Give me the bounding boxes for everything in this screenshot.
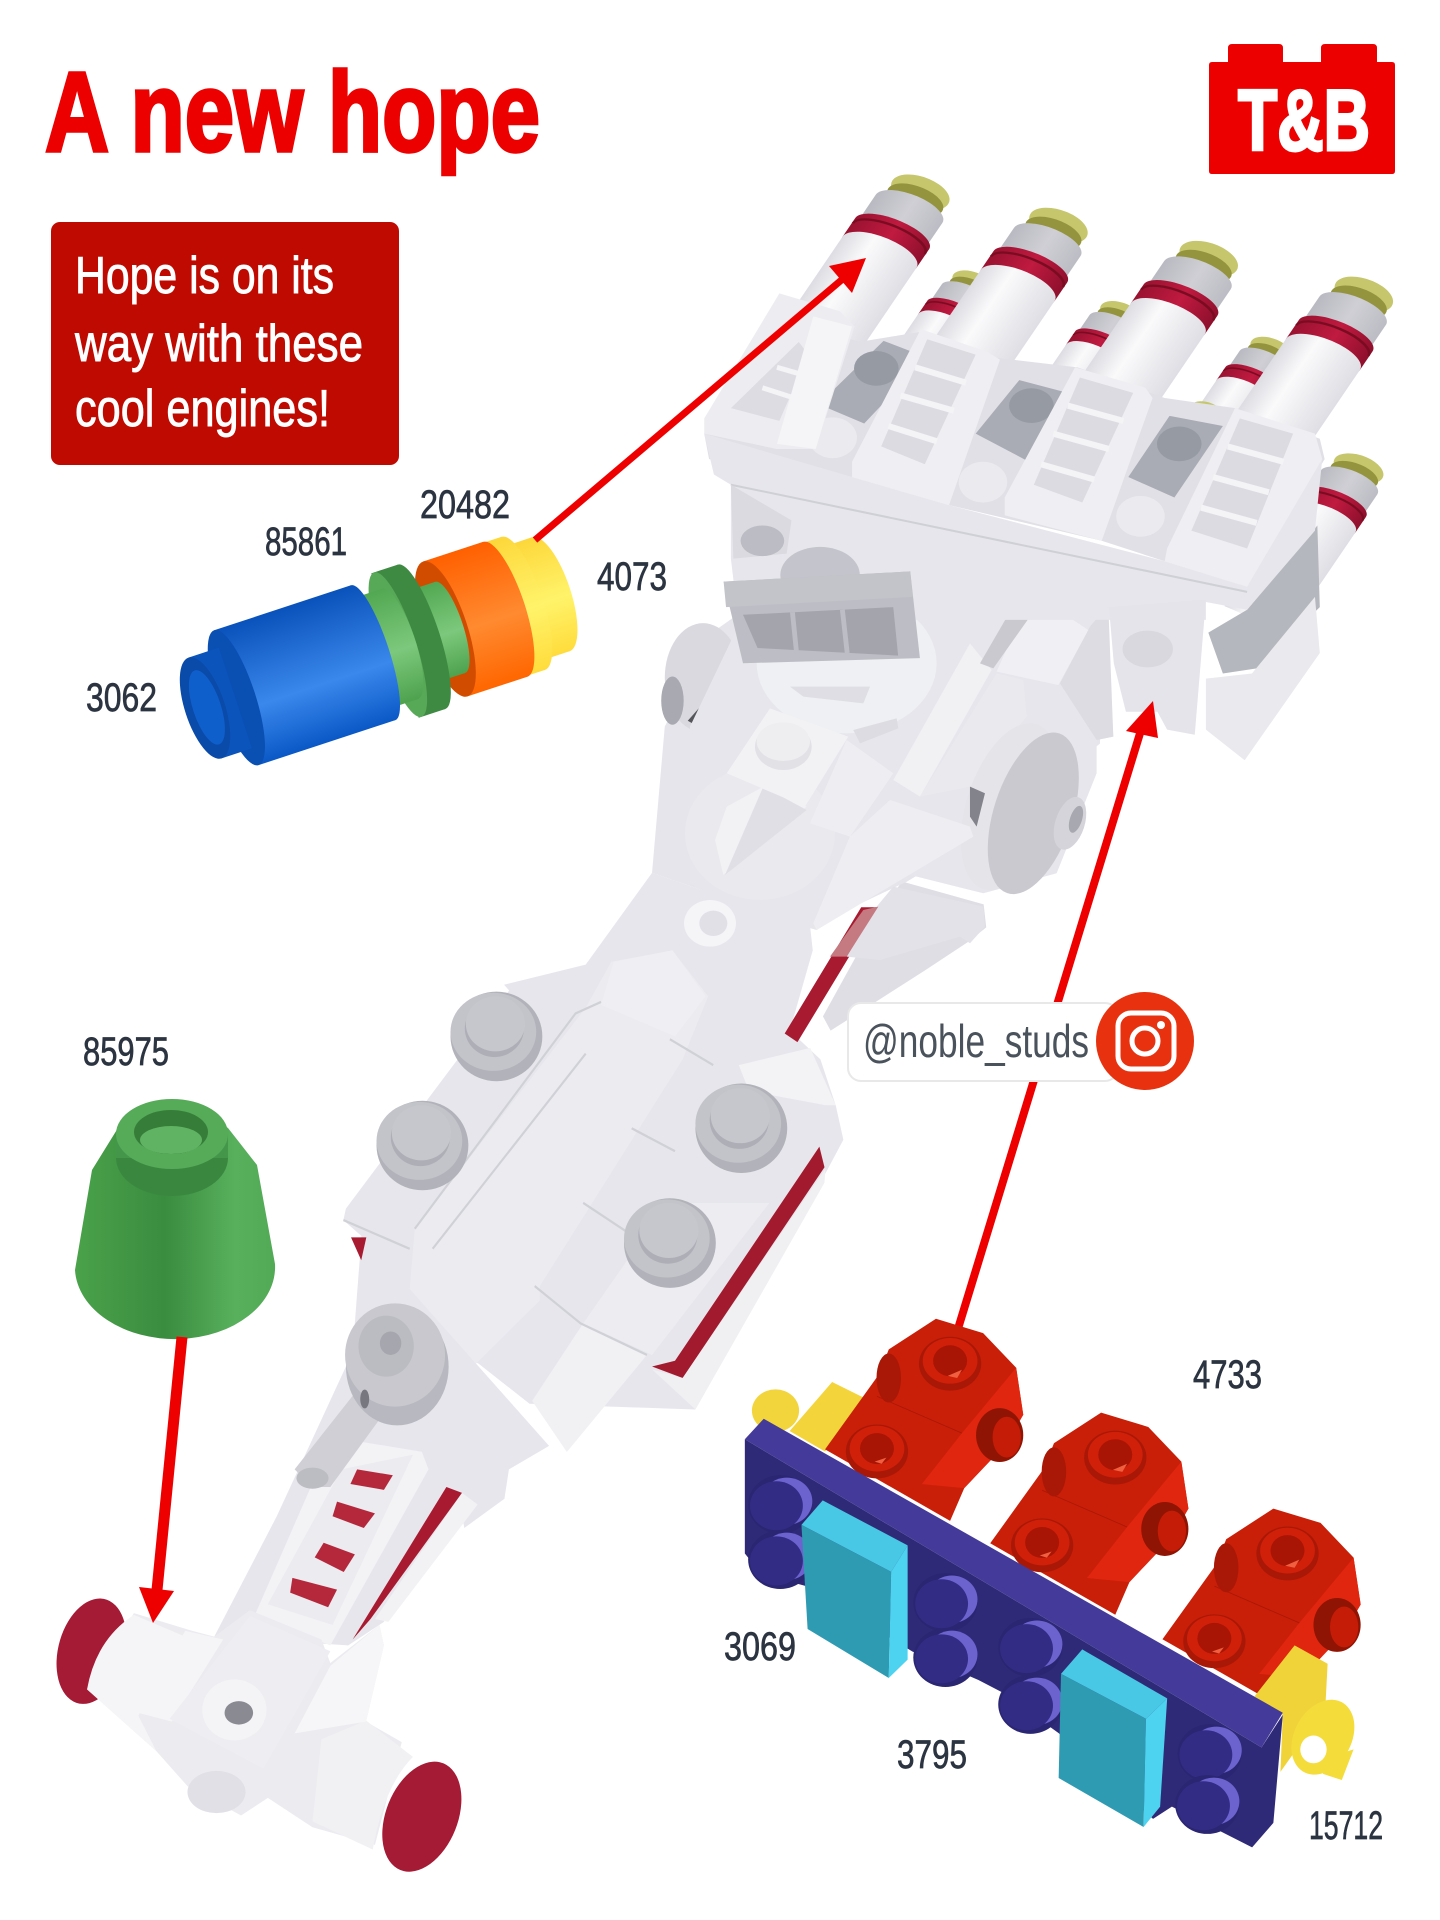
arrow: red bricks to engine mount bbox=[957, 701, 1158, 1332]
hollow stud bbox=[684, 900, 736, 947]
hull studs bbox=[377, 992, 787, 1288]
deck studs bbox=[808, 417, 1165, 537]
engine caps bbox=[42, 1582, 478, 1892]
under fin bbox=[847, 887, 985, 960]
part number labels: 3795 bbox=[897, 1733, 967, 1777]
icon: instagram bbox=[1096, 992, 1194, 1090]
cyan tile right bbox=[1059, 1649, 1167, 1827]
logo: T&B brick: T&B bbox=[1238, 73, 1370, 169]
part number labels: 20482 bbox=[420, 483, 510, 527]
round plate with wedge bbox=[685, 767, 835, 900]
lower deck plate joining hull bbox=[731, 505, 1206, 620]
front stud block bbox=[1109, 599, 1206, 735]
part number labels: 3062 bbox=[86, 676, 157, 720]
cyan tile left bbox=[801, 1500, 908, 1678]
part number labels: 15712 bbox=[1309, 1804, 1383, 1848]
stud block bbox=[727, 708, 848, 807]
triangle plate bbox=[813, 800, 973, 930]
ship mid section bbox=[343, 594, 1100, 1452]
part 20482 orange bbox=[402, 536, 546, 703]
panel: callout: way with these bbox=[74, 315, 363, 373]
social handle badge bbox=[848, 992, 1194, 1090]
side plate tile bbox=[980, 585, 1088, 685]
side disc bbox=[942, 711, 1097, 905]
engines bbox=[763, 163, 1410, 633]
part number labels: 4733 bbox=[1193, 1353, 1262, 1397]
engine deck bbox=[704, 316, 1325, 587]
plate studs bbox=[748, 1475, 1242, 1834]
yellow clip left bbox=[752, 1382, 865, 1451]
panel: callout: cool engines! bbox=[75, 380, 330, 438]
logo: T&B brick bbox=[1209, 44, 1395, 174]
rear hull plating bbox=[652, 594, 1100, 927]
hull seams bbox=[343, 1002, 713, 1355]
ship tail section bbox=[42, 1235, 549, 1892]
grille slope 2 bbox=[852, 329, 1000, 505]
grille slope 3 bbox=[1005, 367, 1153, 541]
purple plate bbox=[745, 1419, 1283, 1847]
yellow clip right bbox=[1254, 1645, 1366, 1782]
grille slope 1 bbox=[704, 293, 854, 449]
part number labels bbox=[83, 483, 1383, 1848]
ship central section with turret and side disc bbox=[684, 573, 1113, 960]
T-crossbar bbox=[87, 1610, 402, 1845]
arrow: engine to ship engine bbox=[535, 258, 866, 540]
part 4073 yellow bbox=[468, 522, 592, 681]
title: A new hope bbox=[45, 49, 540, 175]
panel: callout: Hope is on its bbox=[75, 247, 334, 305]
part 85861 green bbox=[343, 551, 486, 727]
ship tail pin stud bbox=[295, 1303, 449, 1489]
part number labels: 4073 bbox=[597, 555, 667, 599]
part: 85975 green cone bbox=[75, 1099, 275, 1339]
part number labels: 85861 bbox=[265, 520, 347, 564]
rear engine cluster bbox=[704, 163, 1410, 760]
grille slope 4 bbox=[1165, 408, 1322, 587]
part: engine assembly exploded bbox=[162, 516, 594, 786]
grey side mechanism bbox=[1208, 526, 1320, 673]
part number labels: 85975 bbox=[83, 1030, 169, 1074]
part: red bricks and purple plate assembly bbox=[745, 1319, 1366, 1847]
social handle badge: @noble_studs bbox=[863, 1015, 1089, 1067]
arrow: cone to ship engine bbox=[139, 1337, 182, 1623]
part number labels: 3069 bbox=[724, 1625, 796, 1669]
part 3062 blue bbox=[164, 580, 411, 782]
grey grille tile bbox=[724, 571, 920, 663]
panel: callout bbox=[51, 222, 399, 465]
red bricks bbox=[825, 1319, 1361, 1711]
grey ring behind tile bbox=[780, 547, 860, 603]
grey connector pads bbox=[828, 341, 1223, 497]
